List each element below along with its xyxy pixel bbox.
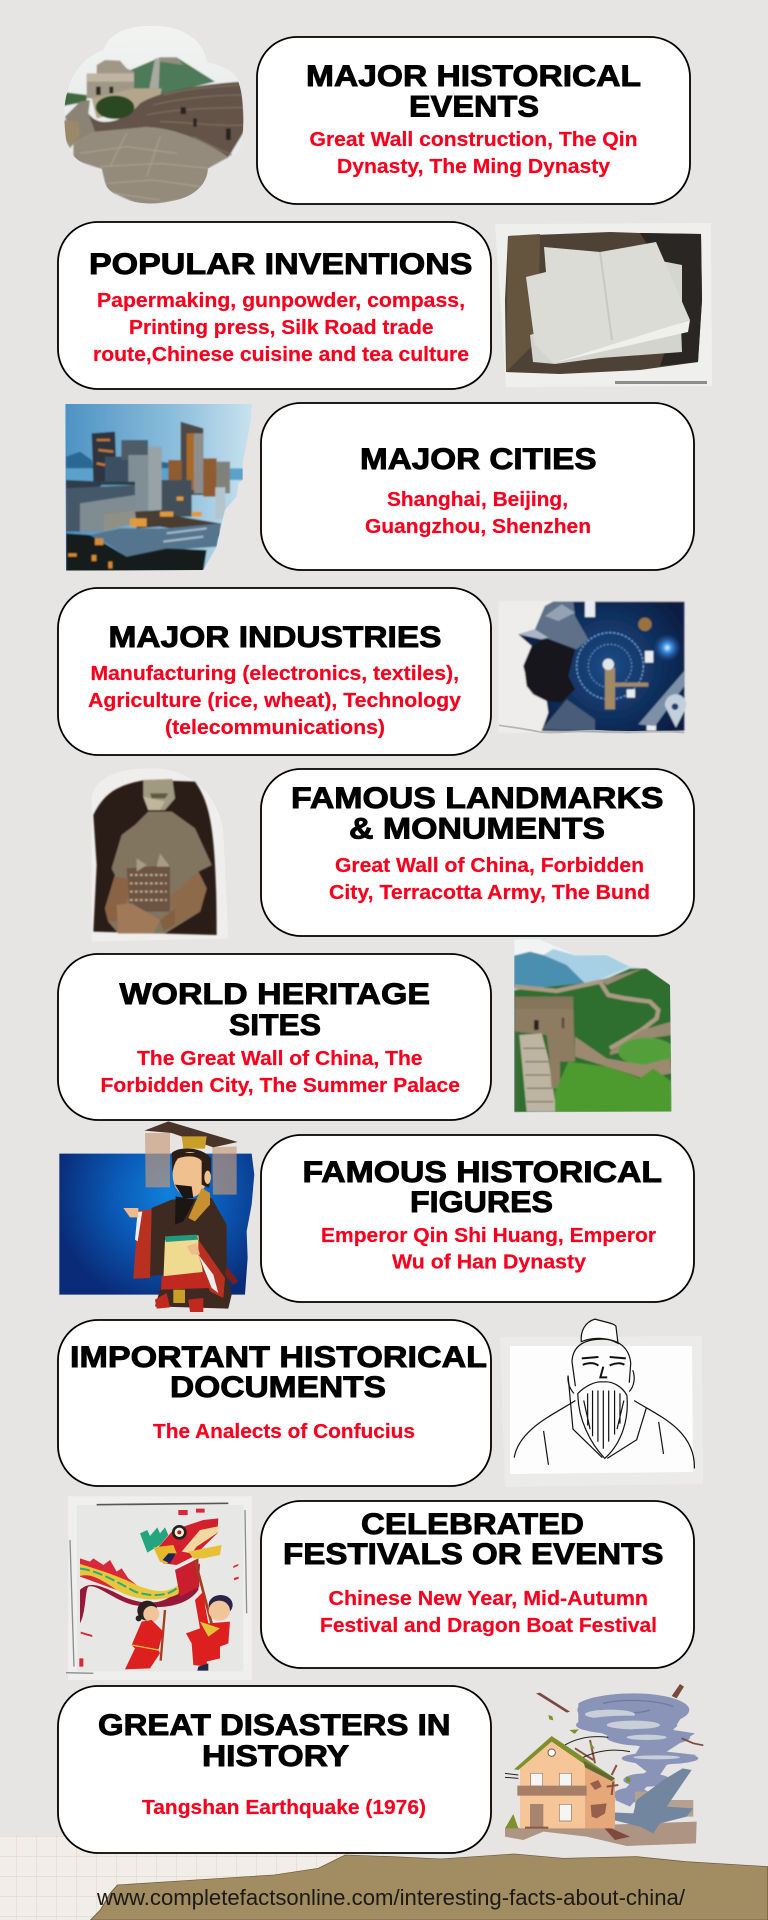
panel: world heritage sites (58, 954, 491, 1120)
image: emperor qin cartoon (59, 1121, 254, 1312)
body text: Tangshan Earthquake (1976) (142, 1797, 426, 1819)
panel: famous historical figures (261, 1135, 694, 1302)
heading: WORLD HERITAGE (120, 978, 430, 1011)
panel: great disasters in history (58, 1686, 491, 1853)
panel: famous landmarks and monuments (261, 769, 694, 936)
heading (70, 1341, 487, 1404)
graph paper footer corner (0, 1836, 350, 1920)
body text: Printing press, Silk Road trade (129, 317, 434, 339)
heading: HISTORY (202, 1740, 349, 1773)
footer url: www.completefactsonline.com/interesting-facts-about-china/ (96, 1885, 686, 1910)
panel: major industries (58, 588, 491, 755)
body text: Shanghai, Beijing, (387, 489, 568, 511)
heading: FAMOUS HISTORICAL (302, 1156, 662, 1189)
body text: City, Terracotta Army, The Bund (329, 882, 650, 904)
heading: EVENTS (409, 90, 539, 124)
body text: Dynasty, The Ming Dynasty (337, 156, 611, 178)
body text (321, 1225, 656, 1274)
torn caption strip (615, 381, 707, 384)
heading: GREAT DISASTERS IN (98, 1709, 450, 1742)
body text: Guangzhou, Shenzhen (365, 516, 591, 538)
body text: Great Wall of China, Forbidden (335, 855, 644, 877)
body text: The Analects of Confucius (153, 1421, 415, 1443)
heading (291, 782, 664, 846)
body text: Chinese New Year, Mid-Autumn (328, 1588, 648, 1610)
image: dragon dance (66, 1501, 248, 1676)
body text (320, 1588, 657, 1637)
body text (365, 489, 591, 538)
body text: Agriculture (rice, wheat), Technology (88, 690, 462, 712)
body text: (telecommunications) (165, 717, 385, 739)
heading: IMPORTANT HISTORICAL (70, 1341, 487, 1374)
body text (93, 290, 469, 366)
heading: SITES (229, 1009, 321, 1042)
heading: & MONUMENTS (349, 812, 605, 846)
body text (329, 855, 650, 904)
body text: Manufacturing (electronics, textiles), (90, 663, 459, 685)
body text: Great Wall construction, The Qin (310, 129, 638, 151)
image: terracotta warrior (92, 768, 228, 942)
heading (98, 1709, 450, 1773)
body text (88, 663, 462, 739)
body text: Wu of Han Dynasty (392, 1252, 587, 1274)
image: confucius line drawing (500, 1319, 703, 1487)
torn kraft paper footer (91, 1854, 768, 1920)
panel: important historical documents (58, 1320, 491, 1486)
heading (302, 1156, 662, 1219)
heading: CELEBRATED (361, 1508, 584, 1541)
heading: FAMOUS LANDMARKS (291, 782, 664, 815)
image: tornado hitting house (505, 1684, 703, 1846)
body text (100, 1048, 460, 1097)
panel: major historical events (257, 37, 690, 204)
body text (310, 129, 638, 178)
panel: popular inventions (58, 222, 491, 389)
body text: Papermaking, gunpowder, compass, (97, 290, 465, 312)
heading (306, 60, 641, 124)
body text: route,Chinese cuisine and tea culture (93, 344, 469, 366)
heading: FESTIVALS OR EVENTS (283, 1538, 664, 1571)
image: handmade paper (495, 223, 712, 387)
heading: MAJOR CITIES (360, 443, 596, 476)
heading (283, 1508, 664, 1571)
heading: FIGURES (410, 1186, 553, 1219)
heading: POPULAR INVENTIONS (89, 248, 472, 281)
image: great wall green mountains (514, 939, 672, 1112)
image: industrial city plant (60, 400, 255, 575)
image: great wall quatrefoil (64, 26, 244, 204)
panel: major cities (261, 403, 694, 570)
body text: Festival and Dragon Boat Festival (320, 1615, 657, 1637)
image: worker double exposure (498, 601, 686, 733)
heading: DOCUMENTS (170, 1371, 386, 1404)
panel: celebrated festivals or events (261, 1501, 694, 1668)
heading (120, 978, 430, 1042)
heading: MAJOR INDUSTRIES (108, 621, 442, 654)
body text: Forbidden City, The Summer Palace (100, 1075, 460, 1097)
heading: MAJOR HISTORICAL (306, 60, 641, 93)
body text: Emperor Qin Shi Huang, Emperor (321, 1225, 656, 1247)
body text: The Great Wall of China, The (137, 1048, 422, 1070)
